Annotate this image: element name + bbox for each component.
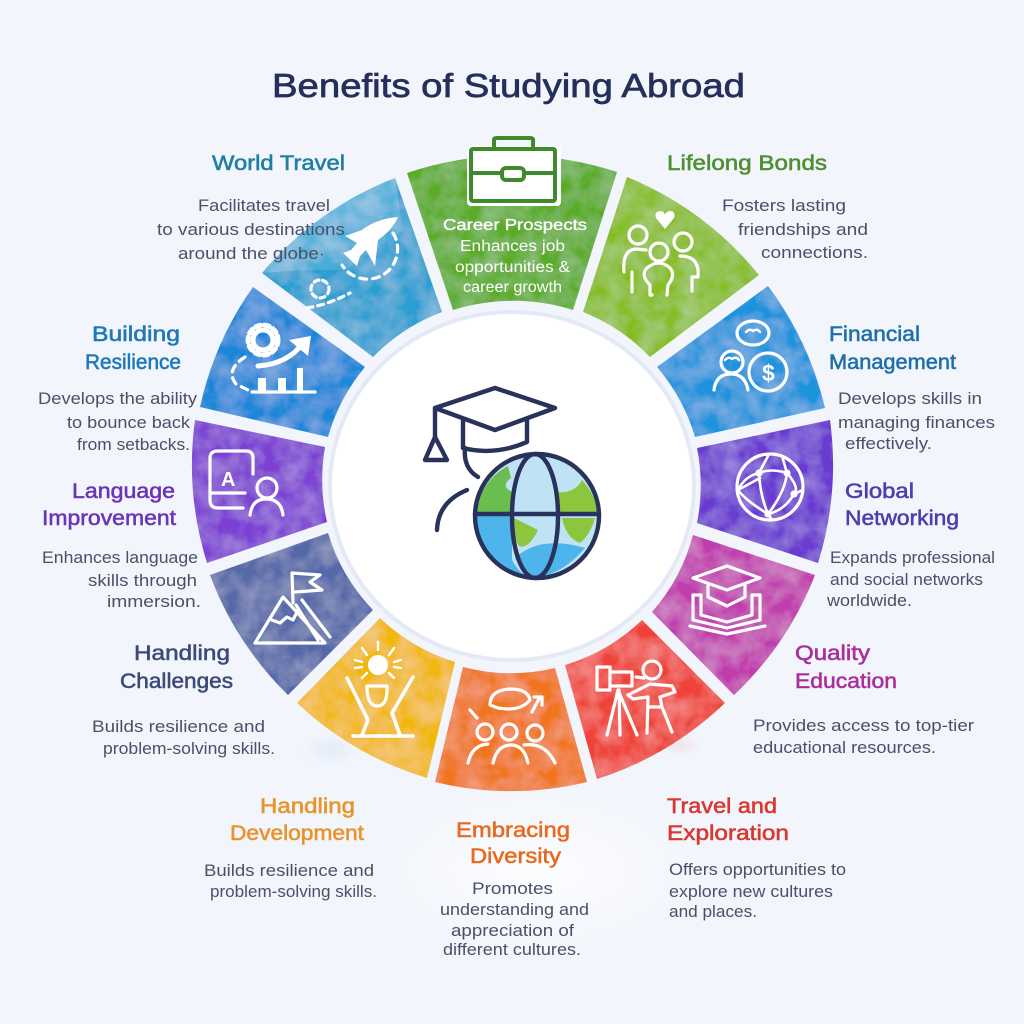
label: handling development: Handling xyxy=(260,795,355,818)
label: global networking: worldwide. xyxy=(826,591,912,610)
label: travel and exploration: Travel and xyxy=(667,795,777,818)
label: embracing diversity: understanding and xyxy=(440,900,589,919)
icon: person cheering under the sun xyxy=(347,642,413,736)
label: travel and exploration xyxy=(667,795,846,921)
label: handling challenges: problem-solving skills. xyxy=(103,739,275,758)
label: language improvement: immersion. xyxy=(107,592,201,611)
icon: group of people with speech bubbles xyxy=(468,689,555,763)
segment: building resilience xyxy=(200,287,365,437)
text: career prospects: Career Prospects xyxy=(443,217,587,234)
label: handling challenges: Challenges xyxy=(120,670,233,693)
label: handling challenges xyxy=(92,642,275,758)
icon: people and coin: $ xyxy=(762,360,775,386)
icon: cap on open book xyxy=(690,566,765,634)
label: financial management: Financial xyxy=(829,323,920,346)
label: global networking: Global xyxy=(845,480,914,503)
icon: three people and heart xyxy=(624,211,698,295)
segment: lifelong bonds xyxy=(583,177,759,357)
segment: handling development xyxy=(297,618,455,778)
label: quality education xyxy=(753,642,974,757)
label: lifelong bonds: friendships and xyxy=(738,220,868,239)
label: global networking: Expands professional xyxy=(830,548,995,567)
segment: language improvement xyxy=(192,420,327,563)
label: handling challenges: Builds resilience and xyxy=(92,717,265,736)
segment: quality education xyxy=(652,535,815,695)
text overlay highlight xyxy=(262,178,403,273)
label: quality education: Provides access to top-tier xyxy=(753,716,974,735)
label: embracing diversity: Diversity xyxy=(470,845,562,868)
label: global networking: Networking xyxy=(845,507,959,530)
segment: financial management xyxy=(657,286,825,437)
label: building resilience: Resilience xyxy=(85,351,181,374)
label: embracing diversity: different cultures. xyxy=(443,940,581,959)
label: lifelong bonds: Lifelong Bonds xyxy=(667,152,827,175)
text: career prospects: career growth xyxy=(463,279,562,296)
label: handling development: problem-solving skills. xyxy=(210,882,377,901)
label: global networking xyxy=(826,480,995,610)
icon: briefcase xyxy=(467,138,561,206)
label: world travel: World Travel xyxy=(212,152,345,175)
icon: mountain with flag xyxy=(255,573,330,643)
label: financial management: Management xyxy=(829,351,956,374)
label: building resilience xyxy=(38,323,198,454)
label: lifelong bonds xyxy=(667,152,868,262)
label: handling development: Development xyxy=(230,822,364,845)
label: travel and exploration: explore new cultures xyxy=(669,882,833,901)
icon: network globe xyxy=(737,454,803,520)
label: building resilience: to bounce back xyxy=(67,413,191,432)
label: language improvement xyxy=(42,480,201,611)
icon: airplane with dashed route xyxy=(307,217,398,308)
label: building resilience: from setbacks. xyxy=(77,435,190,454)
label: lifelong bonds: Fosters lasting xyxy=(722,196,846,215)
label: world travel: around the globe· xyxy=(178,244,325,263)
label: travel and exploration: and places. xyxy=(669,902,757,921)
label: handling development xyxy=(204,795,377,901)
icon: gear and growth chart xyxy=(232,325,315,392)
segment: world travel xyxy=(262,178,442,357)
label: embracing diversity: Promotes xyxy=(472,879,553,898)
label: quality education: Education xyxy=(795,670,897,693)
label: travel and exploration: Offers opportunities to xyxy=(669,860,846,879)
icon: people and coin xyxy=(714,321,787,391)
label: financial management: effectively. xyxy=(845,434,932,453)
center icon: graduation cap and globe xyxy=(425,388,599,578)
label: lifelong bonds: connections. xyxy=(761,243,868,262)
segment: handling challenges xyxy=(210,533,373,695)
segment: career prospects xyxy=(407,138,617,310)
label: global networking: and social networks xyxy=(830,570,983,589)
label: embracing diversity: appreciation of xyxy=(451,921,574,940)
label: world travel xyxy=(157,152,345,263)
label: language improvement: Enhances language xyxy=(42,548,198,567)
text: career prospects xyxy=(443,217,587,296)
label: language improvement: Language xyxy=(72,480,175,503)
segment: global networking xyxy=(697,420,833,563)
label: building resilience: Building xyxy=(92,323,180,346)
label: language improvement: skills through xyxy=(88,571,197,590)
label: world travel: Facilitates travel xyxy=(198,196,330,215)
label: building resilience: Develops the ability xyxy=(38,389,198,408)
label: handling development: Builds resilience and xyxy=(204,861,374,880)
icon: book with letter and person xyxy=(210,451,283,515)
label: financial management xyxy=(829,323,995,453)
label: financial management: Develops skills in xyxy=(838,389,982,408)
label: financial management: managing finances xyxy=(838,413,995,432)
label: travel and exploration: Exploration xyxy=(667,822,789,845)
label: handling challenges: Handling xyxy=(134,642,230,665)
label: world travel: to various destinations xyxy=(157,220,345,239)
label: quality education: Quality xyxy=(795,642,871,665)
segment: travel and exploration xyxy=(565,620,725,779)
title: Benefits of Studying Abroad xyxy=(272,67,745,104)
text: career prospects: Enhances job xyxy=(460,238,565,255)
label: embracing diversity xyxy=(440,819,589,959)
text: career prospects: opportunities & xyxy=(455,259,571,276)
icon: book with letter and person: A xyxy=(221,469,235,491)
segment: embracing diversity xyxy=(435,667,587,791)
label: language improvement: Improvement xyxy=(42,507,176,530)
center circle xyxy=(330,312,694,660)
label: embracing diversity: Embracing xyxy=(456,819,570,842)
label: quality education: educational resources. xyxy=(753,738,936,757)
icon: person with telescope on tripod xyxy=(597,661,675,735)
